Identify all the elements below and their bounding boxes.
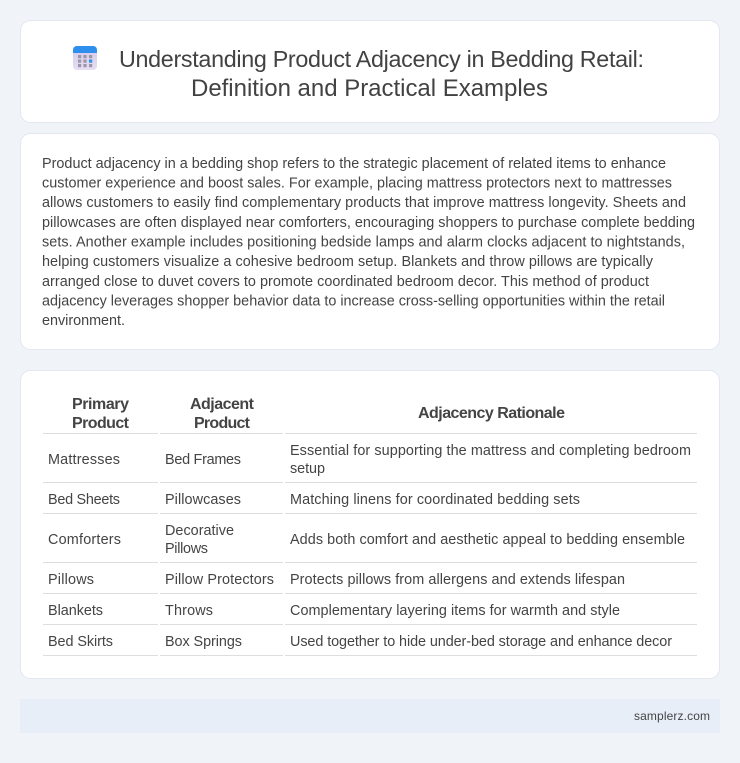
table header: Adjacency Rationale	[418, 405, 565, 422]
table row: mattresses: setup	[290, 461, 325, 477]
table header	[72, 396, 565, 432]
table row: bed skirts	[48, 634, 672, 650]
table row: comforters: Adds both comfort and aesthetic appeal to bedding ensemble	[290, 532, 685, 548]
table header: Product	[194, 415, 251, 432]
text block: description paragraph: Product adjacency in a bedding shop refers to the strategic placement of related items to enhance	[42, 156, 666, 172]
table row: mattresses	[48, 443, 691, 477]
table header: Product	[72, 415, 130, 432]
text block: description paragraph: customer experience and boost sales. For example, placing mattress protectors next to mattresses	[42, 176, 672, 192]
table row: blankets	[48, 603, 620, 619]
table row: bed skirts: Bed Skirts	[48, 634, 113, 650]
table row: pillows: Pillows	[48, 572, 94, 588]
table row: comforters	[48, 523, 685, 557]
table row: mattresses: Essential for supporting the mattress and completing bedroom	[290, 443, 691, 459]
table row: blankets: Throws	[165, 603, 213, 619]
text block: description paragraph: arranged close to duvet covers to promote coordinated bedroom decor. This method of product	[42, 274, 649, 290]
title: Definition and Practical Examples	[191, 75, 548, 102]
table row: bed sheets: Matching linens for coordinated bedding sets	[290, 492, 580, 508]
table row: bed skirts: Box Springs	[165, 634, 242, 650]
table row: mattresses: Mattresses	[48, 452, 120, 468]
footer bar	[20, 699, 720, 733]
table row: comforters: Comforters	[48, 532, 121, 548]
title	[119, 46, 644, 102]
text block: description paragraph: sets. Another example includes positioning bedside lamps and alarm clocks adjacent to nightstands,	[42, 234, 685, 250]
icon: calendar	[73, 46, 97, 70]
table row: bed sheets: Bed Sheets	[48, 492, 120, 508]
footer source text: samplerz.com	[634, 709, 710, 723]
table row: pillows: Protects pillows from allergens and extends lifespan	[290, 572, 625, 588]
table header: Primary	[72, 396, 129, 413]
table row: blankets: Blankets	[48, 603, 103, 619]
table row: comforters: Decorative	[165, 523, 234, 539]
text block: description paragraph: helping customers visualize a cohesive bedroom setup. Blankets and throw pillows are typically	[42, 254, 654, 270]
table row: bed skirts: Used together to hide under-bed storage and enhance decor	[290, 634, 672, 650]
table header: Adjacent	[190, 396, 255, 413]
text block: description paragraph: adjacency leverages shopper behavior data to increase cross-selling opportunities within the retail	[42, 294, 665, 310]
table row: pillows: Pillow Protectors	[165, 572, 274, 588]
text block: description paragraph: allows customers to easily find complementary products that improve mattress longevity. Sheets and	[42, 195, 686, 211]
table row: mattresses: Bed Frames	[165, 452, 241, 468]
text block: description paragraph: environment.	[42, 313, 125, 329]
table row: bed sheets: Pillowcases	[165, 492, 241, 508]
panel: description	[20, 134, 720, 350]
table row: pillows	[48, 572, 625, 588]
title: Understanding Product Adjacency in Bedding Retail:	[119, 46, 644, 72]
table row: blankets: Complementary layering items for warmth and style	[290, 603, 620, 619]
table row: comforters: Pillows	[165, 541, 208, 557]
panel: title header	[20, 20, 720, 122]
panel: table	[20, 370, 720, 678]
text block: description paragraph	[42, 156, 695, 329]
table row: bed sheets	[48, 492, 580, 508]
text block: description paragraph: pillowcases are often displayed near comforters, encouraging shoppers to purchase complete bedding	[42, 215, 695, 231]
